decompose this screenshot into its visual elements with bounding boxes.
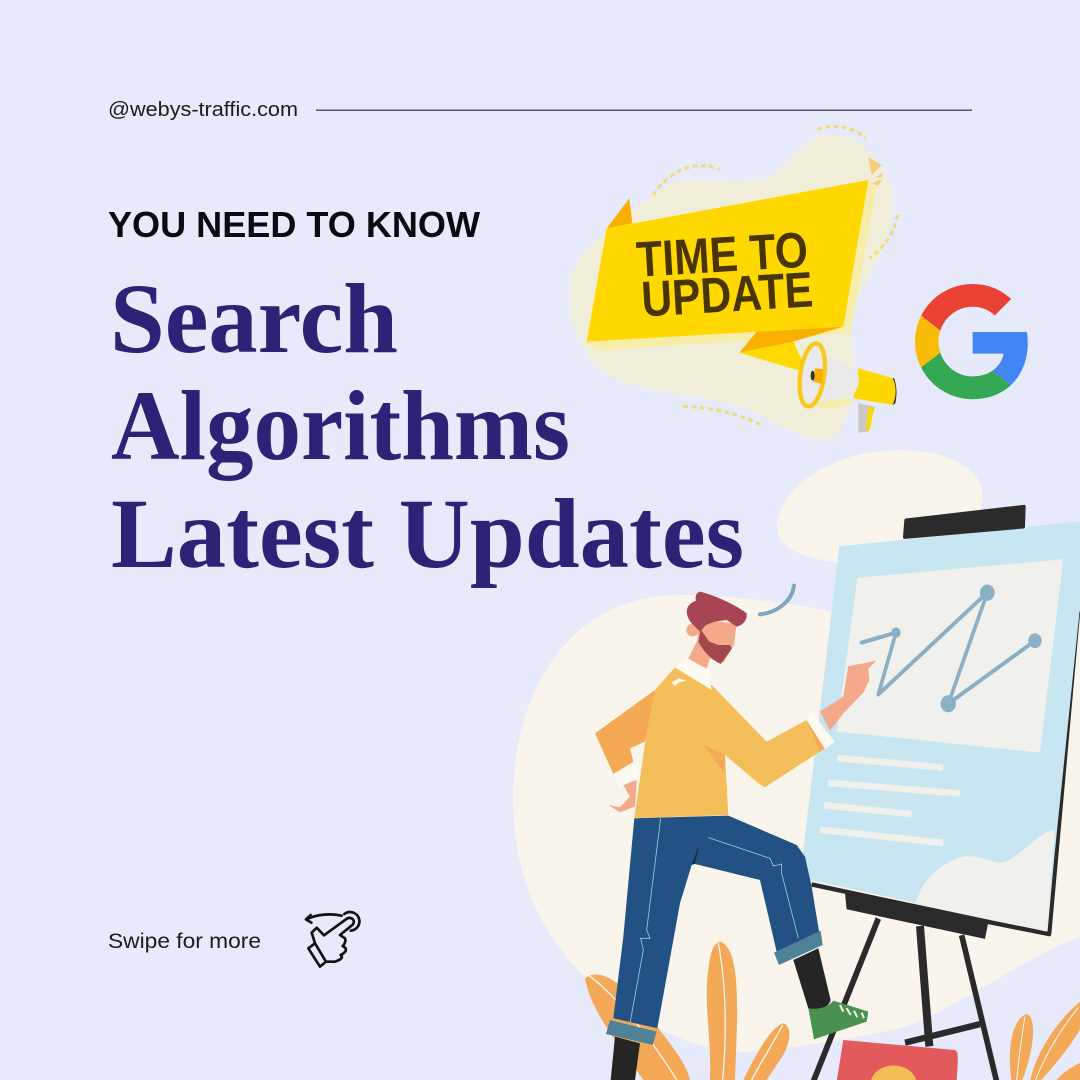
presenter figure: [585, 586, 877, 1080]
speech tick: [760, 586, 794, 614]
sweater: [634, 667, 825, 818]
sparks: [868, 157, 883, 186]
swipe label: Swipe for more: [108, 930, 261, 953]
jeans cuffs: [774, 931, 823, 965]
shelf: [845, 893, 988, 939]
banner folds: [607, 198, 632, 228]
red folder: [837, 1040, 958, 1080]
left cuff and hand: [608, 780, 637, 812]
title: Latest Updates: [111, 478, 744, 589]
shoe: [808, 1001, 868, 1039]
right cuff: [807, 712, 835, 749]
cloud corner: [915, 830, 1055, 932]
back sleeve: [595, 690, 655, 774]
header rule: [316, 110, 972, 111]
text lines: [820, 758, 960, 843]
banner shadow: [587, 180, 877, 351]
google logo: [915, 284, 1028, 399]
banner text: TIME TO: [635, 222, 809, 288]
neck and collar: [688, 638, 712, 669]
top clip: [905, 507, 1024, 537]
jeans: [613, 816, 819, 1028]
banner text: UPDATE: [640, 261, 815, 327]
leaves behind figure: [585, 942, 789, 1080]
head: [686, 624, 699, 636]
icon: swipe hand: [306, 912, 359, 967]
chart panel: [837, 559, 1063, 753]
hair: [687, 592, 747, 632]
right leaves: [1010, 1002, 1080, 1080]
right arm: [820, 661, 877, 731]
background blob: upper cream: [777, 450, 983, 562]
title: [110, 263, 744, 589]
megaphone banner illustration: [570, 126, 897, 440]
title: Algorithms: [111, 370, 570, 481]
megaphone: [813, 393, 853, 408]
eyebrow heading: YOU NEED TO KNOW: [108, 204, 480, 245]
dashes: [653, 126, 897, 425]
board body: [800, 521, 1080, 932]
background blob: lower cream: [513, 595, 1080, 1052]
website handle: @webys-traffic.com: [108, 99, 298, 121]
easel legs: [813, 919, 997, 1080]
jeans seams: [630, 818, 798, 1023]
banner body: [587, 180, 868, 342]
easel with chart board: [800, 507, 1080, 1080]
legs: [611, 1037, 640, 1080]
board frame: [812, 611, 1078, 934]
beard: [698, 629, 732, 664]
banner text: [635, 221, 815, 328]
chart line: [862, 593, 1035, 704]
title: Search: [110, 263, 398, 374]
yellow blob: [570, 134, 893, 440]
